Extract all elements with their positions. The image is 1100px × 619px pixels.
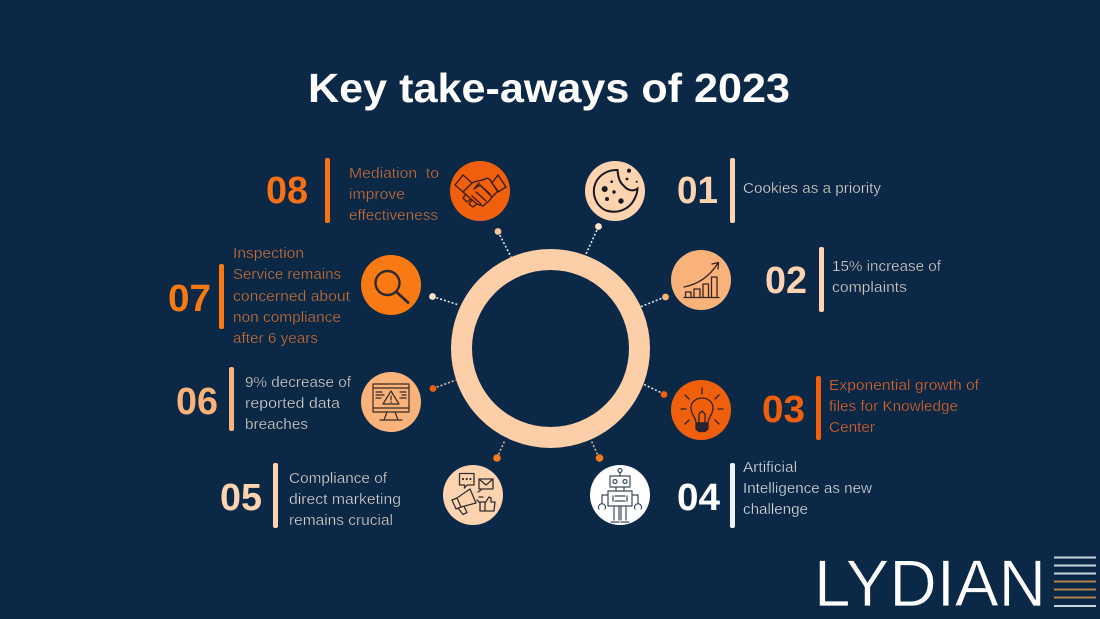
number 04: 04 xyxy=(677,477,720,519)
text 05: remains crucial xyxy=(289,512,393,529)
panel: item 04 xyxy=(590,440,872,528)
panel: item 08 xyxy=(266,158,511,257)
bar 04 xyxy=(730,463,735,528)
text 07: Inspection xyxy=(233,245,304,262)
text 05 xyxy=(289,470,401,529)
panel: item 01 xyxy=(585,158,882,254)
connector 05 xyxy=(493,440,505,462)
text 04: Intelligence as new xyxy=(743,480,872,497)
text 02: 15% increase of xyxy=(832,258,942,275)
number 07: 07 xyxy=(168,278,211,320)
text 07: concerned about xyxy=(233,288,351,305)
bar 02 xyxy=(819,247,824,312)
number 01: 01 xyxy=(677,170,718,212)
connector 07 xyxy=(429,293,459,305)
text 03 xyxy=(829,377,980,436)
text 05: direct marketing xyxy=(289,491,401,508)
logo: Lydian xyxy=(814,546,1096,619)
text 04 xyxy=(743,459,872,518)
text 03: files for Knowledge xyxy=(829,398,958,415)
icon: warning monitor xyxy=(361,372,421,432)
connector 02 xyxy=(640,294,669,307)
logo lines xyxy=(1054,558,1096,606)
panel: item 07 xyxy=(168,245,459,347)
panel: item 06 xyxy=(176,367,456,433)
icon: robot xyxy=(590,465,650,525)
bar 08 xyxy=(325,158,330,223)
text 01: Cookies as a priority xyxy=(743,180,882,197)
text 06: 9% decrease of xyxy=(245,374,352,391)
text 07: non compliance xyxy=(233,309,341,326)
number 08: 08 xyxy=(266,170,308,212)
icon: handshake xyxy=(450,161,510,221)
number 05: 05 xyxy=(220,477,262,519)
title: Key take-aways of 2023 xyxy=(308,65,790,111)
bar 06 xyxy=(229,367,234,431)
text 07: Service remains xyxy=(233,266,341,283)
text 07: after 6 years xyxy=(233,330,318,347)
icon: light bulb xyxy=(671,380,731,440)
number 03: 03 xyxy=(762,389,805,431)
icon: growth chart xyxy=(671,250,731,310)
text 06: reported data xyxy=(245,395,341,412)
icon: cookie xyxy=(585,161,645,221)
text 06: breaches xyxy=(245,416,308,433)
bar 01 xyxy=(730,158,735,223)
connector 06 xyxy=(430,380,456,392)
connector 03 xyxy=(643,384,667,398)
central ring xyxy=(462,260,640,438)
number 02: 02 xyxy=(765,260,807,302)
text 02: complaints xyxy=(832,279,907,296)
logo wordmark: LYDIAN xyxy=(814,546,1046,619)
icon: marketing xyxy=(443,465,503,525)
icon: magnifying glass xyxy=(361,255,421,315)
text 07 xyxy=(233,245,351,347)
text 04: challenge xyxy=(743,501,808,518)
bar 03 xyxy=(816,376,821,440)
bar 05 xyxy=(273,463,278,528)
text 03: Exponential growth of xyxy=(829,377,980,394)
panel: item 02 xyxy=(640,247,942,312)
text 08 xyxy=(349,165,439,224)
text 08: improve xyxy=(349,186,405,203)
text 08: effectiveness xyxy=(349,207,438,224)
connector 08 xyxy=(495,228,511,257)
text 03: Center xyxy=(829,419,875,436)
connector 01 xyxy=(586,223,602,254)
text 05: Compliance of xyxy=(289,470,388,487)
bar 07 xyxy=(219,264,224,329)
connector 04 xyxy=(591,440,603,462)
panel: item 05 xyxy=(220,440,505,529)
panel: item 03 xyxy=(643,376,980,440)
text 08: Mediation to xyxy=(349,165,439,182)
text 04: Artificial xyxy=(743,459,797,476)
text 02 xyxy=(832,258,942,296)
number 06: 06 xyxy=(176,381,218,423)
text 06 xyxy=(245,374,352,433)
